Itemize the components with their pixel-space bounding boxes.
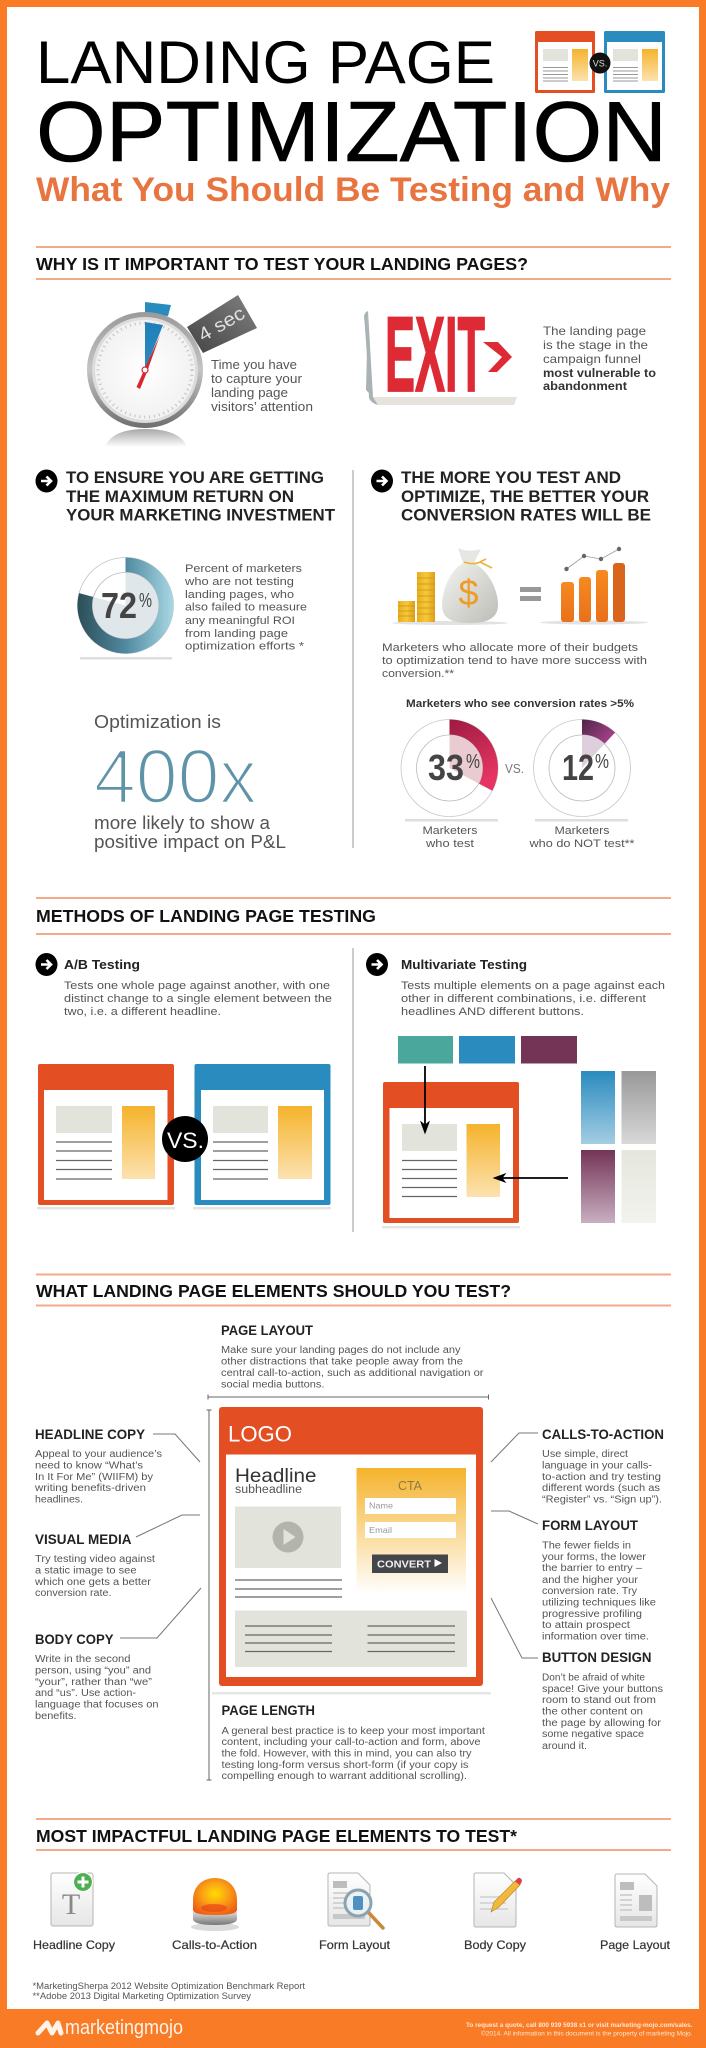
callout: headline copy: writing benefits-driven (34, 1483, 146, 1494)
text: most vulnerable stage: The landing page (543, 324, 646, 338)
chart: 72 percent donut (77, 558, 174, 660)
callout: button design: some negative space (542, 1729, 644, 1740)
callout: button design (491, 1598, 663, 1752)
icon: exit sign (364, 294, 517, 414)
callout: button design: BUTTON DESIGN (542, 1650, 652, 1665)
callout: body copy: language that focuses on (35, 1700, 158, 1710)
text: percent of marketers: Percent of marketers (185, 563, 302, 575)
arrow: left to form (494, 1174, 568, 1182)
label: versus: VS. (505, 762, 524, 776)
label: Form Layout (319, 1938, 391, 1952)
text: most vulnerable stage: abandonment (543, 379, 627, 393)
chart: 12 percent marketers who do not test (528, 720, 635, 850)
callout: form layout: to attain prospect (542, 1620, 630, 1631)
stat: 400x more likely: 400x (94, 734, 257, 820)
callout: body copy: benefits. (35, 1711, 76, 1722)
heading: maximum return: THE MAXIMUM RETURN ON (66, 487, 294, 506)
callout: form layout: your forms, the lower (542, 1552, 647, 1563)
text: marketers who allocate: conversion.** (382, 668, 455, 680)
callout: button design: Don’t be afraid of white (542, 1672, 645, 1684)
callout: page length: PAGE LENGTH (222, 1703, 315, 1718)
heading: multivariate testing: Multivariate Testing (401, 958, 527, 972)
text: percent of marketers: landing pages, who (185, 589, 294, 601)
text: percent of marketers (184, 563, 307, 652)
callout: visual media: VISUAL MEDIA (35, 1532, 132, 1547)
chart: growing bars (540, 547, 648, 624)
callout: form layout: progressive profiling (542, 1609, 642, 1620)
body lines (235, 1580, 342, 1597)
callout: button design: the page by allowing for (542, 1718, 662, 1729)
footer contact text: ©2014. All information in this document is the property of marketing Mojo. (481, 2030, 693, 2038)
callout: body copy: Write in the second (35, 1654, 130, 1665)
callout: page layout: other distractions that take people away from the (221, 1356, 463, 1368)
text: marketers who allocate: Marketers who allocate more of their budgets (382, 642, 639, 654)
description (64, 980, 332, 1018)
element: headline copy (33, 1872, 115, 1952)
callout: page layout (221, 1323, 484, 1390)
arrow: down to headline (421, 1066, 429, 1133)
callout: body copy (35, 1588, 201, 1722)
height dimension line (206, 1410, 212, 1780)
callout: headline copy: HEADLINE COPY (35, 1427, 145, 1442)
callout: visual media: Try testing video against (35, 1554, 155, 1565)
callout: calls-to-action: to-action and try testing (542, 1472, 661, 1483)
description: Tests multiple elements on a page against each (401, 980, 665, 992)
versus badge (162, 1116, 208, 1162)
chart: 33 percent marketers who test (401, 720, 498, 850)
text: time to capture attention: Time you have (211, 358, 297, 372)
page A (37, 1064, 175, 1210)
text: most vulnerable stage: campaign funnel (543, 352, 641, 366)
chart: 33 percent marketers who test: 33 (428, 747, 464, 788)
text: time to capture attention: landing page (211, 386, 288, 400)
form colour swatches (581, 1071, 656, 1223)
callout: headline copy: headlines. (35, 1494, 83, 1506)
callout: button design: the other content on (542, 1706, 643, 1718)
page B (193, 1064, 331, 1210)
element: form layout (319, 1873, 391, 1952)
subheadline: subheadline (235, 1484, 302, 1496)
page C (382, 1082, 520, 1228)
heading: maximum return: TO ENSURE YOU ARE GETTING (66, 468, 324, 487)
icon: document with pencil (474, 1873, 522, 1927)
description (401, 980, 665, 1018)
callout: calls-to-action (491, 1427, 664, 1506)
label: Calls-to-Action (172, 1938, 257, 1952)
title line: landing page: LANDING PAGE (36, 29, 495, 96)
arrow bullet: return on investment (36, 470, 58, 492)
heading: better conversion: OPTIMIZE, THE BETTER YOUR (401, 487, 649, 506)
callout: body copy: and “us”. Use action- (35, 1688, 136, 1699)
text: most vulnerable stage: is the stage in the (543, 338, 648, 352)
label: Page Layout (600, 1938, 671, 1952)
chart: 33 percent marketers who test: Marketers (422, 825, 478, 837)
callout: button design: space! Give your buttons (542, 1684, 663, 1695)
label: Headline Copy (33, 1938, 115, 1952)
callout: page layout: Make sure your landing pages do not include any (221, 1345, 460, 1356)
footer contact text: To request a quote, call 800 939 5938 x1 or visit marketing-mojo.com/sales. (466, 2023, 693, 2029)
footer contact text (466, 2023, 693, 2038)
chart: 33 percent marketers who test: who test (425, 838, 474, 850)
stat: 400x more likely: more likely to show a (94, 813, 271, 833)
text: marketers who allocate: to optimization tend to have more success with (382, 655, 647, 667)
column divider (352, 470, 354, 848)
heading: better conversion: THE MORE YOU TEST AND (401, 468, 621, 487)
callout: visual media: a static image to see (35, 1566, 137, 1576)
call-to-action form (356, 1468, 466, 1594)
callout: headline copy: need to know “What’s (35, 1460, 143, 1472)
footnotes: **Adobe 2013 Digital Marketing Optimization Survey (32, 1991, 252, 2001)
callout: visual media: conversion rate. (35, 1588, 112, 1599)
chart: 72 percent donut: 72 (101, 585, 137, 626)
heading: maximum return (66, 468, 336, 524)
title block (36, 29, 670, 209)
callout: page length: content, including your call-to-action and form, above (222, 1737, 481, 1748)
callout: form layout: the barrier to entry – (542, 1563, 642, 1574)
icon: text document with plus: T (62, 1888, 80, 1921)
icon: coins and money bag: $ (458, 572, 479, 613)
icon: coins and money bag (392, 548, 508, 625)
callout: visual media: which one gets a better (34, 1577, 152, 1588)
callout: form layout: utilizing techniques like (542, 1598, 656, 1608)
callout: form layout: conversion rate. Try (542, 1586, 637, 1597)
description: headlines AND different buttons. (401, 1006, 584, 1018)
chart: 72 percent donut: % (139, 590, 152, 612)
callout: page layout: PAGE LAYOUT (221, 1323, 314, 1338)
subtitle: What You Should Be Testing and Why (36, 171, 670, 209)
callout: button design: room to stand out from (542, 1695, 656, 1706)
text: marketers who allocate (382, 642, 647, 680)
callout: page layout: social media buttons. (221, 1380, 324, 1390)
text: percent of marketers: from landing page (185, 628, 288, 640)
callout: page length: compelling enough to warrant additional scrolling). (222, 1771, 467, 1782)
stat: 400x more likely: Optimization is (94, 712, 221, 732)
description: distinct change to a single element between the (64, 993, 332, 1005)
title line: optimization: OPTIMIZATION (36, 85, 667, 180)
footnotes: *MarketingSherpa 2012 Website Optimization Benchmark Report (32, 1981, 306, 1991)
call-to-action form: Name (369, 1500, 393, 1510)
callout: body copy: person, using “you” and (35, 1666, 151, 1676)
chart heading: conversion rates: Marketers who see conversion rates >5% (406, 698, 634, 710)
logo: LOGO (228, 1422, 292, 1446)
description: other in different combinations, i.e. different (401, 993, 646, 1005)
callout: calls-to-action: language in your calls- (542, 1460, 652, 1472)
landing page wireframe (212, 1407, 491, 1694)
video placeholder (235, 1506, 341, 1568)
section heading: most impactful: MOST IMPACTFUL LANDING PAGE ELEMENTS TO TEST* (36, 1826, 517, 1846)
icon: beacon light (191, 1878, 239, 1931)
section heading: methods: METHODS OF LANDING PAGE TESTING (36, 906, 376, 926)
callout: headline copy (34, 1427, 200, 1506)
bottom content block (235, 1610, 467, 1667)
label: Body Copy (464, 1938, 526, 1952)
heading: maximum return: YOUR MARKETING INVESTMENT (66, 506, 336, 524)
callout: button design: around it. (542, 1741, 587, 1752)
call-to-action form: CONVERT (377, 1558, 432, 1570)
callout: form layout: information over time. (542, 1632, 649, 1642)
section heading: elements to test: WHAT LANDING PAGE ELEMENTS SHOULD YOU TEST? (36, 1281, 511, 1301)
text: time to capture attention: to capture your (211, 372, 302, 386)
arrow bullet (366, 953, 388, 976)
call-to-action form: CTA (398, 1479, 423, 1493)
call-to-action form: Email (369, 1525, 392, 1535)
chart: 12 percent marketers who do not test: % (595, 751, 609, 773)
text: most vulnerable stage: most vulnerable to (543, 366, 656, 380)
section heading: why test: WHY IS IT IMPORTANT TO TEST YOUR LANDING PAGES? (36, 254, 528, 274)
heading: A/B testing: A/B Testing (64, 958, 140, 972)
stat: 400x more likely (94, 712, 286, 852)
callout: form layout: The fewer fields in (542, 1540, 631, 1552)
panel: multivariate testing (366, 953, 665, 1228)
description: Tests one whole page against another, with one (64, 980, 330, 992)
callout: calls-to-action: Use simple, direct (542, 1449, 628, 1460)
chart: 12 percent marketers who do not test: who do NOT test** (528, 838, 635, 850)
element: body copy (464, 1873, 526, 1952)
callout: form layout: and the higher your (542, 1575, 639, 1586)
icon: layout document (615, 1874, 657, 1927)
callout: form layout: FORM LAYOUT (542, 1518, 639, 1533)
headline: Headline (235, 1465, 316, 1487)
panel: A/B testing (36, 953, 332, 1210)
width dimension line (208, 1394, 488, 1400)
callout: headline copy: In It For Me” (WIIFM) by (35, 1472, 153, 1483)
icon: equals sign (520, 587, 541, 601)
text: percent of marketers: also failed to measure (185, 602, 307, 614)
icon: document with magnifier (328, 1873, 383, 1928)
text: percent of marketers: any meaningful ROI (185, 615, 295, 627)
versus badge: VS. (167, 1128, 204, 1153)
callout: visual media (34, 1515, 200, 1599)
callout: page length: testing long-form versus short-form (if your copy is (222, 1760, 468, 1771)
icon: two pages versus (535, 31, 665, 93)
callout: page layout: central call-to-action, such as additional navigation or (221, 1368, 484, 1379)
callout: calls-to-action: CALLS-TO-ACTION (542, 1427, 664, 1442)
callout: form layout (491, 1511, 656, 1642)
footer logo: marketingmojo: marketingmojo (65, 2017, 183, 2039)
callout: body copy: BODY COPY (35, 1632, 114, 1647)
column divider (352, 948, 354, 1232)
arrow bullet: better conversion (371, 470, 393, 492)
callout: page length: A general best practice is to keep your most important (222, 1726, 485, 1737)
icon: two pages versus: VS. (593, 58, 607, 68)
heading: better conversion: CONVERSION RATES WILL BE (401, 506, 651, 524)
callout: headline copy: Appeal to your audience’s (35, 1449, 162, 1460)
text: most vulnerable stage (543, 324, 656, 393)
chart: 12 percent marketers who do not test: 12 (562, 747, 594, 788)
footnotes (32, 1981, 306, 2001)
icon: stopwatch with 4 sec tag (87, 295, 257, 447)
text: time to capture attention (211, 358, 313, 414)
text: percent of marketers: optimization efforts * (185, 640, 305, 652)
callout: calls-to-action: “Register” vs. “Sign up”). (542, 1494, 662, 1506)
icon: stopwatch with 4 sec tag: 4 sec (195, 303, 249, 346)
icon: exit sign: EXIT (385, 294, 485, 414)
element: page layout (600, 1874, 671, 1952)
callout: page length (222, 1703, 485, 1782)
chart: 12 percent marketers who do not test: Marketers (554, 825, 610, 837)
arrow bullet (36, 953, 58, 976)
text: percent of marketers: who are not testing (184, 576, 294, 588)
text: time to capture attention: visitors’ attention (211, 400, 313, 414)
headline colour swatches (398, 1036, 577, 1064)
element: calls-to-action (172, 1878, 257, 1952)
heading: better conversion (401, 468, 651, 524)
callout: body copy: “your”, rather than “we” (35, 1677, 152, 1688)
chart: 33 percent marketers who test: % (466, 751, 480, 773)
callout: page length: the fold. However, with this in mind, you can also try (222, 1748, 472, 1760)
callout: calls-to-action: different words (such as (542, 1483, 660, 1494)
description: two, i.e. a different headline. (64, 1006, 221, 1018)
stat: 400x more likely: positive impact on P&L (94, 832, 286, 852)
